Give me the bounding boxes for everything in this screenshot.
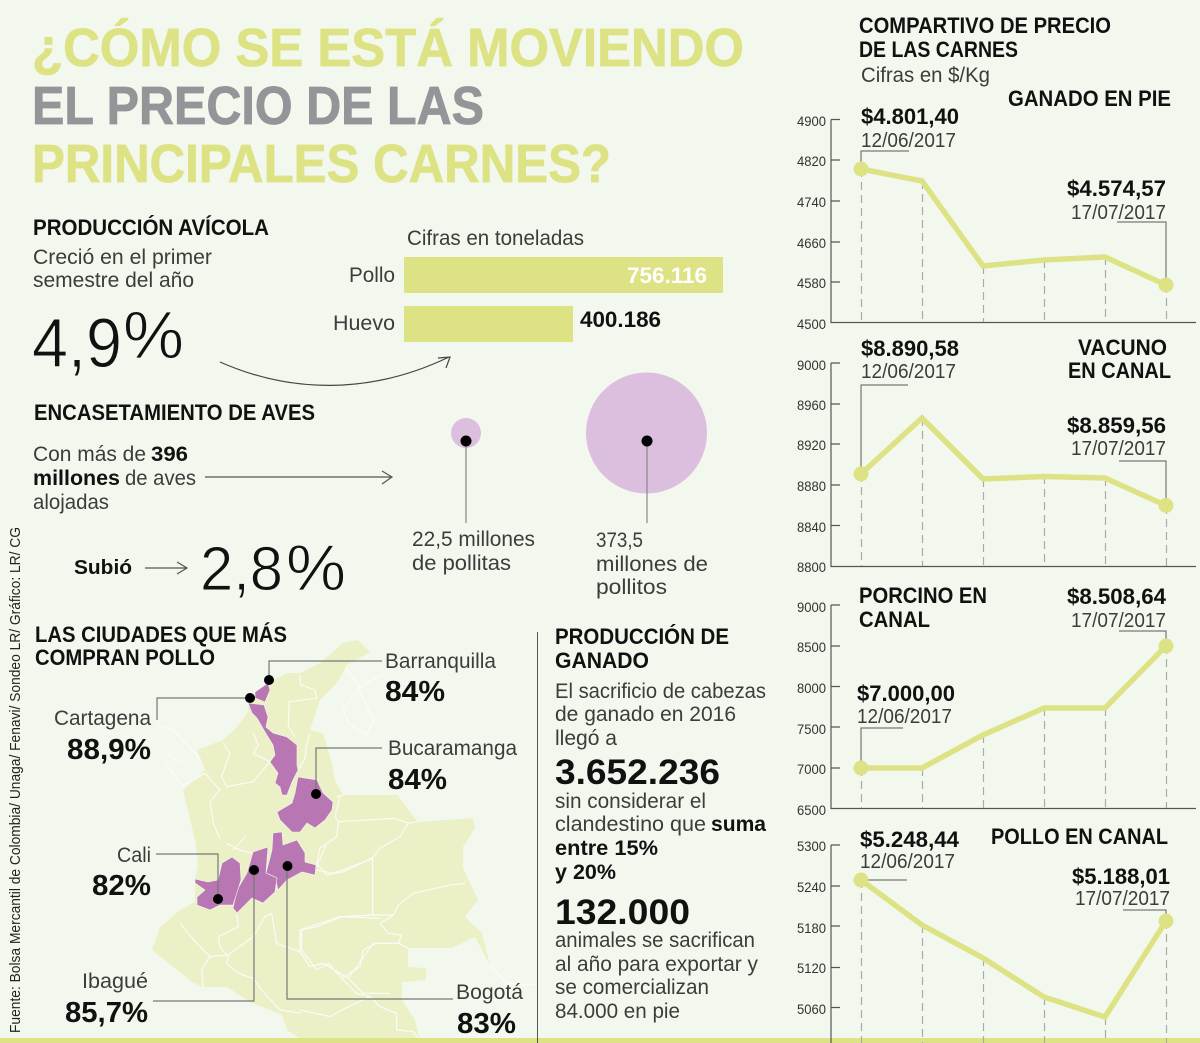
axis: 5180 — [797, 920, 826, 936]
big number 2,8%: % — [286, 531, 346, 604]
text: clandestino: entre 15% — [555, 837, 658, 860]
line chart: pollo en canal — [797, 824, 1174, 1043]
axis: 5300 — [797, 838, 826, 854]
callout: Cali: 82% — [92, 870, 151, 902]
big number 2,8% — [200, 531, 346, 604]
axis — [797, 113, 1196, 332]
bar chart: toneladas: 756.116 — [627, 263, 707, 288]
text: con más de 396 millones: de aves — [125, 467, 196, 490]
axis: 7500 — [797, 721, 826, 737]
department borders — [180, 675, 540, 1038]
line chart: vacuno en canal — [797, 335, 1196, 575]
big number 4,9%: % — [123, 298, 184, 373]
text: con más de 396 millones: millones — [33, 467, 120, 490]
chart title: CANAL — [859, 607, 930, 632]
number: 132.000: 132.000 — [555, 893, 690, 932]
axis: 4820 — [797, 153, 826, 169]
text: sacrificio: llegó a — [555, 727, 617, 750]
value labels: 12/06/2017 — [861, 361, 956, 383]
data line — [854, 418, 1174, 513]
text: exportar: se comercializan — [555, 976, 709, 999]
bar chart: toneladas: Huevo — [333, 312, 395, 335]
value labels: 17/07/2017 — [1071, 610, 1166, 632]
callout: Barranquilla: Barranquilla — [385, 650, 496, 673]
text: exportar: animales se sacrifican — [555, 929, 755, 952]
title: ¿CÓMO SE ESTÁ MOVIENDO — [32, 18, 744, 78]
heading: comparativo de precio: DE LAS CARNES — [859, 37, 1018, 62]
bar chart: toneladas: 400.186 — [580, 307, 661, 332]
callout: Cartagena — [54, 693, 255, 766]
bottom band — [0, 1038, 1200, 1043]
big number 2,8%: 2,8 — [200, 535, 283, 604]
callout: Cartagena: 88,9% — [67, 734, 151, 766]
text: con más de 396 millones — [33, 443, 196, 514]
axis: 5120 — [797, 960, 826, 976]
axis: 9000 — [797, 599, 826, 615]
value labels: $4.574,57 — [1067, 176, 1166, 201]
value labels: $5.248,44 — [860, 827, 960, 852]
heading: comparativo de precio: COMPARTIVO DE PRECIO — [859, 13, 1111, 38]
axis — [797, 599, 1196, 818]
axis — [797, 357, 1196, 575]
text: creció en el primer semestre: semestre del año — [33, 269, 194, 292]
big number 4,9%: 4,9 — [32, 304, 122, 382]
data line — [854, 872, 1174, 1017]
text: exportar — [555, 929, 758, 1023]
value labels: 17/07/2017 — [1071, 438, 1166, 460]
heading: ciudades — [35, 622, 287, 670]
text: sacrificio: de ganado en 2016 — [555, 703, 736, 726]
title: EL PRECIO DE LAS — [32, 76, 484, 136]
heading: ciudades: LAS CIUDADES QUE MÁS — [35, 622, 287, 647]
value labels: 17/07/2017 — [1075, 888, 1170, 910]
axis: 8880 — [797, 478, 826, 494]
bubble: pollitos — [586, 372, 708, 599]
line chart: porcino en canal — [797, 583, 1196, 818]
heading: encasetamiento: ENCASETAMIENTO DE AVES — [34, 400, 315, 425]
value labels: $8.859,56 — [1067, 413, 1166, 438]
heading: producción de ganado — [555, 624, 729, 673]
text: exportar: al año para exportar y — [555, 953, 758, 976]
callout: Bogotá: 83% — [457, 1008, 516, 1040]
axis: 4580 — [797, 275, 826, 291]
text: con más de 396 millones: Con más de — [33, 443, 146, 466]
leaders — [866, 880, 1166, 915]
leaders — [861, 151, 1166, 280]
value labels: $8.508,64 — [1067, 584, 1167, 609]
axis: 5240 — [797, 879, 826, 895]
chart title: POLLO EN CANAL — [991, 824, 1168, 849]
callout: Bucaramanga: 84% — [388, 764, 447, 796]
heading: producción de ganado: GANADO — [555, 648, 649, 673]
value labels: 12/06/2017 — [857, 706, 952, 728]
bar chart: toneladas: Cifras en toneladas — [407, 227, 584, 250]
data line — [854, 638, 1174, 776]
bar chart: toneladas: Pollo — [349, 264, 395, 287]
title: PRINCIPALES CARNES? — [32, 134, 611, 194]
leaders — [861, 385, 1166, 500]
number: 3.652.236: 3.652.236 — [555, 753, 720, 792]
panel: producción de ganado — [555, 624, 766, 1023]
chart title: VACUNO — [1078, 335, 1167, 360]
value labels: 17/07/2017 — [1071, 202, 1166, 224]
value labels — [857, 584, 1167, 728]
arrow: subió — [145, 562, 187, 574]
text: con más de 396 millones: 396 — [151, 443, 188, 466]
panel: encasetamiento de aves — [33, 372, 708, 604]
callout: Cali: Cali — [117, 844, 151, 867]
axis: 4900 — [797, 113, 826, 129]
axis: 4660 — [797, 235, 826, 251]
callout: Bogotá — [282, 861, 523, 1040]
value labels — [860, 827, 1170, 910]
text: sacrificio: El sacrificio de cabezas — [555, 680, 766, 703]
value labels: $4.801,40 — [861, 104, 959, 129]
callout: Cartagena: Cartagena — [54, 707, 151, 730]
heading: comparativo de precio: Cifras en $/Kg — [861, 64, 990, 87]
callout: Bucaramanga: Bucaramanga — [388, 737, 517, 760]
heading: comparativo de precio — [859, 13, 1111, 87]
value labels — [861, 104, 1166, 224]
callout: Ibagué: Ibagué — [82, 970, 148, 993]
data line — [854, 162, 1174, 292]
value labels: 12/06/2017 — [861, 130, 956, 152]
text: exportar: 84.000 en pie — [555, 1000, 680, 1023]
axis: 7000 — [797, 761, 826, 777]
text: clandestino: clandestino que — [555, 813, 706, 836]
axis: 4500 — [797, 316, 826, 332]
value labels: $7.000,00 — [857, 681, 955, 706]
callout: Barranquilla — [264, 650, 496, 708]
callout: Ibagué: 85,7% — [65, 997, 148, 1029]
title — [32, 18, 744, 194]
axis — [797, 838, 840, 1043]
axis: 8500 — [797, 639, 826, 655]
callout: Cali — [92, 844, 223, 904]
bubble: pollitas — [412, 418, 535, 575]
bubble: pollitos: millones de — [596, 553, 708, 576]
chart title — [859, 583, 987, 632]
callout: Bucaramanga — [311, 737, 517, 799]
callout: Ibagué — [65, 865, 259, 1029]
highlighted departments — [195, 683, 333, 913]
axis: 4740 — [797, 194, 826, 210]
big number 4,9% — [32, 298, 184, 382]
text: clandestino: suma — [711, 813, 766, 836]
heading: producción de ganado: PRODUCCIÓN DE — [555, 624, 729, 649]
axis: 5060 — [797, 1001, 826, 1017]
axis: 6500 — [797, 802, 826, 818]
bubble: pollitos: pollitos — [596, 576, 667, 599]
chart title: EN CANAL — [1068, 358, 1171, 383]
neighbouring borders — [157, 665, 383, 787]
chart title: PORCINO EN — [859, 583, 987, 608]
axis: 8800 — [797, 559, 826, 575]
axis: 9000 — [797, 357, 826, 373]
leaders — [861, 631, 1166, 762]
axis: 8000 — [797, 680, 826, 696]
bubble: pollitas: 22,5 millones — [412, 528, 535, 551]
map: Colombia — [152, 640, 540, 1040]
text: creció en el primer semestre: Creció en el primer — [33, 246, 212, 269]
chart title: GANADO EN PIE — [1008, 86, 1171, 111]
value labels — [861, 336, 1166, 460]
value labels: $8.890,58 — [861, 336, 959, 361]
text: con más de 396 millones: alojadas — [33, 491, 109, 514]
text: clandestino: y 20% — [555, 861, 616, 884]
bubble: pollitos: 373,5 — [596, 529, 643, 552]
text: sacrificio — [555, 680, 766, 750]
text: creció en el primer semestre — [33, 246, 212, 292]
bar chart: toneladas — [333, 227, 723, 342]
panel: producción avícola — [32, 215, 723, 385]
text: clandestino — [555, 790, 766, 884]
source note: Fuente: Bolsa Mercantil de Colombia/ Unaga/ Fenavi/ Sondeo LR/ Gráfico: LR/ CG — [7, 527, 24, 1033]
subió label: Subió — [74, 557, 132, 579]
callout: Bogotá: Bogotá — [456, 981, 523, 1004]
heading: producción avícola: PRODUCCIÓN AVÍCOLA — [33, 215, 269, 240]
line chart: ganado en pie — [797, 86, 1196, 332]
callout: Barranquilla: 84% — [385, 676, 445, 708]
arrow: aves to circles — [205, 471, 392, 484]
value labels: $5.188,01 — [1072, 864, 1170, 889]
chart title — [1068, 335, 1171, 383]
text: clandestino: sin considerar el — [555, 790, 706, 813]
axis: 8960 — [797, 397, 826, 413]
value labels: 12/06/2017 — [860, 851, 955, 873]
axis: 8840 — [797, 519, 826, 535]
country shape — [152, 640, 490, 1040]
arrow: curved — [220, 357, 450, 385]
axis: 8920 — [797, 437, 826, 453]
heading: ciudades: COMPRAN POLLO — [35, 645, 215, 670]
bubble: pollitas: de pollitas — [412, 552, 511, 575]
